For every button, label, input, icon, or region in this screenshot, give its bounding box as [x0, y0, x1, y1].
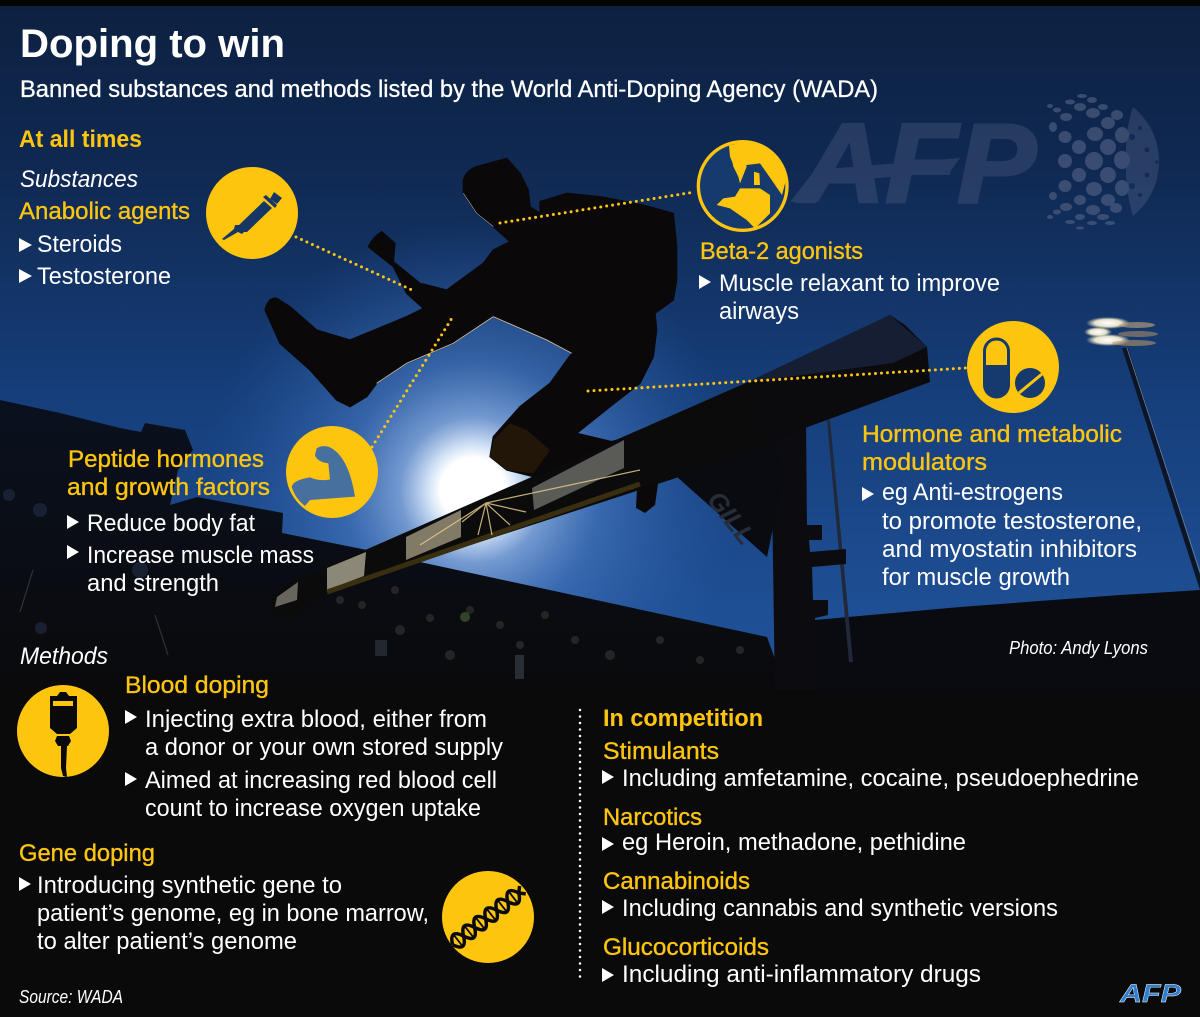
- thin pole: [827, 420, 853, 662]
- dotted leader lines: [296, 192, 966, 447]
- panel: blood doping: Blood doping: [125, 672, 269, 699]
- panel: hormone and metabolic modulators: modulators: [862, 449, 987, 476]
- panel: in competition: [602, 705, 1139, 988]
- icon: inhaler face: [697, 140, 789, 232]
- logo: AFP small: AFP: [1119, 980, 1181, 1008]
- panel: gene doping: Gene doping: [19, 840, 155, 867]
- sun rays: [420, 470, 640, 545]
- icon: DNA helix: [442, 871, 534, 963]
- icon: flexed arm: [286, 426, 378, 518]
- panel: in competition: Including anti-inflammatory drugs: [622, 961, 981, 988]
- divider: dotted vertical: [579, 710, 581, 982]
- panel: in competition: Including cannabis and synthetic versions: [622, 895, 1058, 922]
- watermark: AFP globe: [1047, 94, 1159, 230]
- panel: peptide hormones: and strength: [87, 570, 219, 597]
- panel: peptide hormones: Reduce body fat: [87, 510, 255, 537]
- source note: Source: WADA: [19, 987, 123, 1007]
- panel: beta-2 agonists: Beta-2 agonists: [700, 238, 863, 265]
- panel: in competition: Stimulants: [603, 738, 719, 765]
- panel: anabolic agents: [19, 198, 190, 290]
- panel: beta-2 agonists: Muscle relaxant to improve: [719, 270, 1000, 297]
- panel: hormone and metabolic modulators: to promote testosterone,: [882, 508, 1142, 535]
- athlete foot below hurdle: [636, 484, 658, 513]
- panel: peptide hormones: and growth factors: [67, 474, 270, 501]
- watermark: AFP logo: AFP: [797, 101, 1036, 226]
- athlete silhouette: [265, 158, 677, 477]
- floodlight tower: [1084, 317, 1200, 590]
- panel: blood doping: Injecting extra blood, either from: [145, 706, 487, 733]
- panel: peptide hormones: [67, 446, 314, 597]
- heading: substances: Substances: [20, 166, 138, 193]
- hurdle: [270, 315, 930, 700]
- panel: blood doping: count to increase oxygen uptake: [145, 795, 481, 822]
- panel: anabolic agents: Steroids: [37, 231, 122, 258]
- hurdle: GILL: [701, 485, 761, 550]
- panel: hormone and metabolic modulators: for muscle growth: [882, 564, 1070, 591]
- panel: gene doping: to alter patient’s genome: [37, 928, 297, 955]
- icon: pills: [967, 321, 1059, 413]
- panel: in competition: In competition: [603, 705, 763, 732]
- panel: in competition: Cannabinoids: [603, 868, 750, 895]
- panel: gene doping: [19, 840, 429, 955]
- panel: anabolic agents: Testosterone: [37, 263, 171, 290]
- panel: gene doping: patient’s genome, eg in bone marrow,: [37, 900, 429, 927]
- grandstand left: [0, 400, 790, 700]
- subtitle: Banned substances and methods listed by the World Anti-Doping Agency (WADA): [20, 76, 878, 103]
- panel: anabolic agents: Anabolic agents: [19, 198, 190, 225]
- title: Doping to win: [20, 22, 285, 66]
- grandstand right: [780, 590, 1200, 700]
- icon: blood bag: [17, 685, 109, 777]
- panel: in competition: eg Heroin, methadone, pethidine: [622, 829, 966, 856]
- panel: blood doping: Aimed at increasing red blood cell: [145, 767, 497, 794]
- panel: hormone and metabolic modulators: Hormone and metabolic: [862, 421, 1122, 448]
- panel: in competition: Including amfetamine, cocaine, pseudoephedrine: [622, 765, 1139, 792]
- panel: peptide hormones: Increase muscle mass: [87, 542, 314, 569]
- panel: at all times heading: At all times: [19, 126, 142, 153]
- panel: blood doping: [125, 672, 503, 822]
- dark lower band: [0, 690, 1200, 1017]
- panel: beta-2 agonists: airways: [719, 298, 799, 325]
- panel: blood doping: a donor or your own stored supply: [145, 734, 503, 761]
- panel: in competition: Narcotics: [603, 804, 702, 831]
- heading: methods: Methods: [20, 643, 108, 670]
- panel: hormone and metabolic modulators: [862, 421, 1142, 591]
- panel: hormone and metabolic modulators: eg Anti-estrogens: [882, 479, 1063, 506]
- photo credit: Photo: Andy Lyons: [1009, 638, 1148, 658]
- panel: gene doping: Introducing synthetic gene to: [37, 872, 342, 899]
- panel: in competition: Glucocorticoids: [603, 934, 769, 961]
- icon: syringe: [206, 167, 298, 259]
- panel: peptide hormones: Peptide hormones: [68, 446, 264, 473]
- panel: beta-2 agonists: [699, 238, 1000, 325]
- panel: hormone and metabolic modulators: and myostatin inhibitors: [882, 536, 1137, 563]
